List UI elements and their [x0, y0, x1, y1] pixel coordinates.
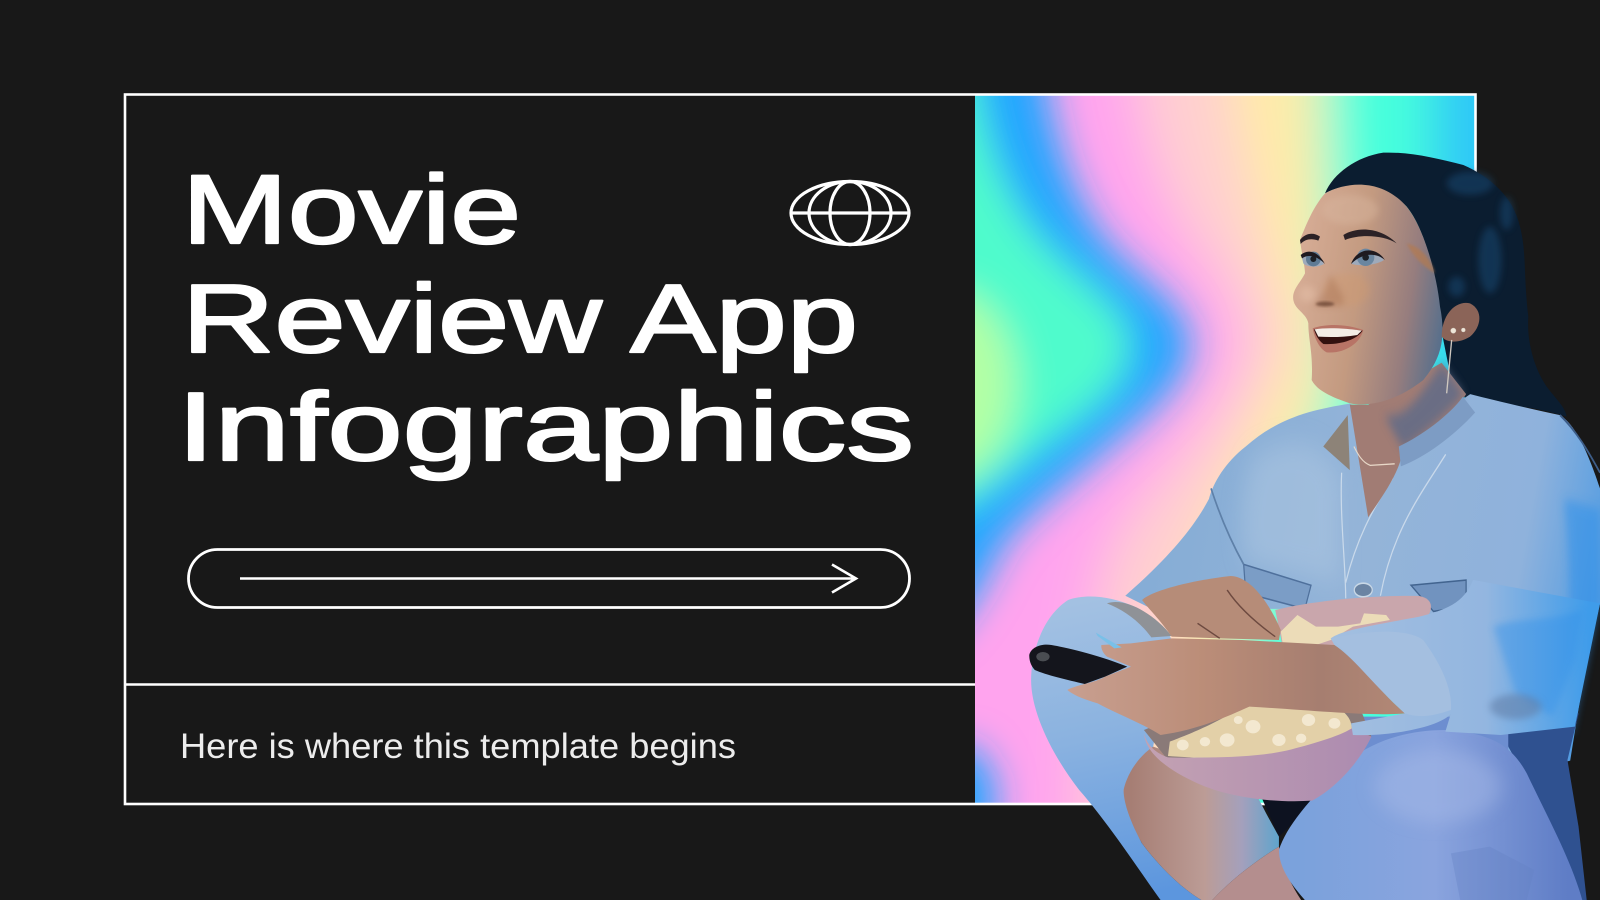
title: Infographics — [177, 372, 914, 481]
cheek warm — [1323, 273, 1370, 307]
ear — [1442, 303, 1479, 342]
title — [177, 155, 914, 481]
bowl rim — [1275, 596, 1431, 647]
collar right — [1399, 397, 1475, 466]
face — [1293, 185, 1443, 404]
shirt right blue glow — [1562, 496, 1600, 736]
shirt seams and pockets — [1211, 415, 1600, 611]
finger nail — [1096, 633, 1122, 648]
shirt button — [1354, 583, 1372, 597]
shin skin — [1124, 747, 1279, 900]
collar — [1323, 415, 1350, 470]
photo: woman with popcorn — [1029, 153, 1600, 900]
neck — [1350, 363, 1466, 517]
knee cuff — [1107, 602, 1172, 637]
remote — [1029, 645, 1127, 684]
divider line — [125, 683, 975, 686]
eyebrows — [1300, 230, 1397, 244]
head — [1293, 185, 1479, 404]
popcorn kernels — [1177, 714, 1340, 750]
outer frame — [125, 94, 1476, 804]
lower body — [1029, 576, 1600, 900]
torso — [1125, 363, 1600, 771]
teeth — [1315, 328, 1362, 337]
neck shadow — [1384, 363, 1464, 449]
title: Review App — [182, 264, 858, 373]
thigh pocket — [1451, 848, 1480, 900]
icon: arrow — [240, 564, 856, 592]
mouth inner — [1314, 329, 1363, 344]
foot skin — [1212, 847, 1301, 900]
hair highlights — [1447, 172, 1513, 297]
nose highlight — [1299, 286, 1315, 302]
nose — [1313, 273, 1344, 307]
eyes — [1301, 249, 1385, 267]
necklace — [1354, 447, 1395, 465]
bowl body — [1144, 727, 1371, 801]
finger lines — [1198, 590, 1275, 638]
icon: globe — [791, 182, 909, 244]
right thigh — [1279, 730, 1582, 900]
thigh light — [1375, 750, 1501, 823]
sleeve cuff light — [1382, 633, 1451, 716]
left leg — [1031, 597, 1201, 900]
popcorn bottom — [1168, 706, 1352, 758]
subtitle: Here is where this template begins — [180, 727, 736, 766]
sleeve blue streak — [1493, 610, 1582, 717]
gradient panel — [975, 96, 1474, 803]
title: Movie — [182, 155, 521, 264]
sleeve underside backing — [1364, 716, 1508, 750]
right sleeve — [1331, 580, 1600, 735]
earrings — [1447, 328, 1465, 393]
bowl interior — [1144, 712, 1372, 758]
forehead light — [1322, 195, 1378, 225]
sleeve dark fold — [1490, 694, 1542, 719]
mouth — [1313, 325, 1363, 353]
shirt light areas — [1241, 443, 1340, 583]
popcorn top — [1281, 613, 1390, 645]
hair — [1325, 153, 1567, 417]
dark gap — [1262, 800, 1310, 836]
left hand — [1142, 576, 1281, 640]
nostril — [1316, 302, 1334, 306]
forearm and hand — [1067, 638, 1405, 735]
temple warm patch — [1407, 243, 1435, 273]
right hip — [1508, 713, 1587, 900]
arrow pill — [188, 550, 910, 608]
remote sensor — [1036, 652, 1050, 661]
